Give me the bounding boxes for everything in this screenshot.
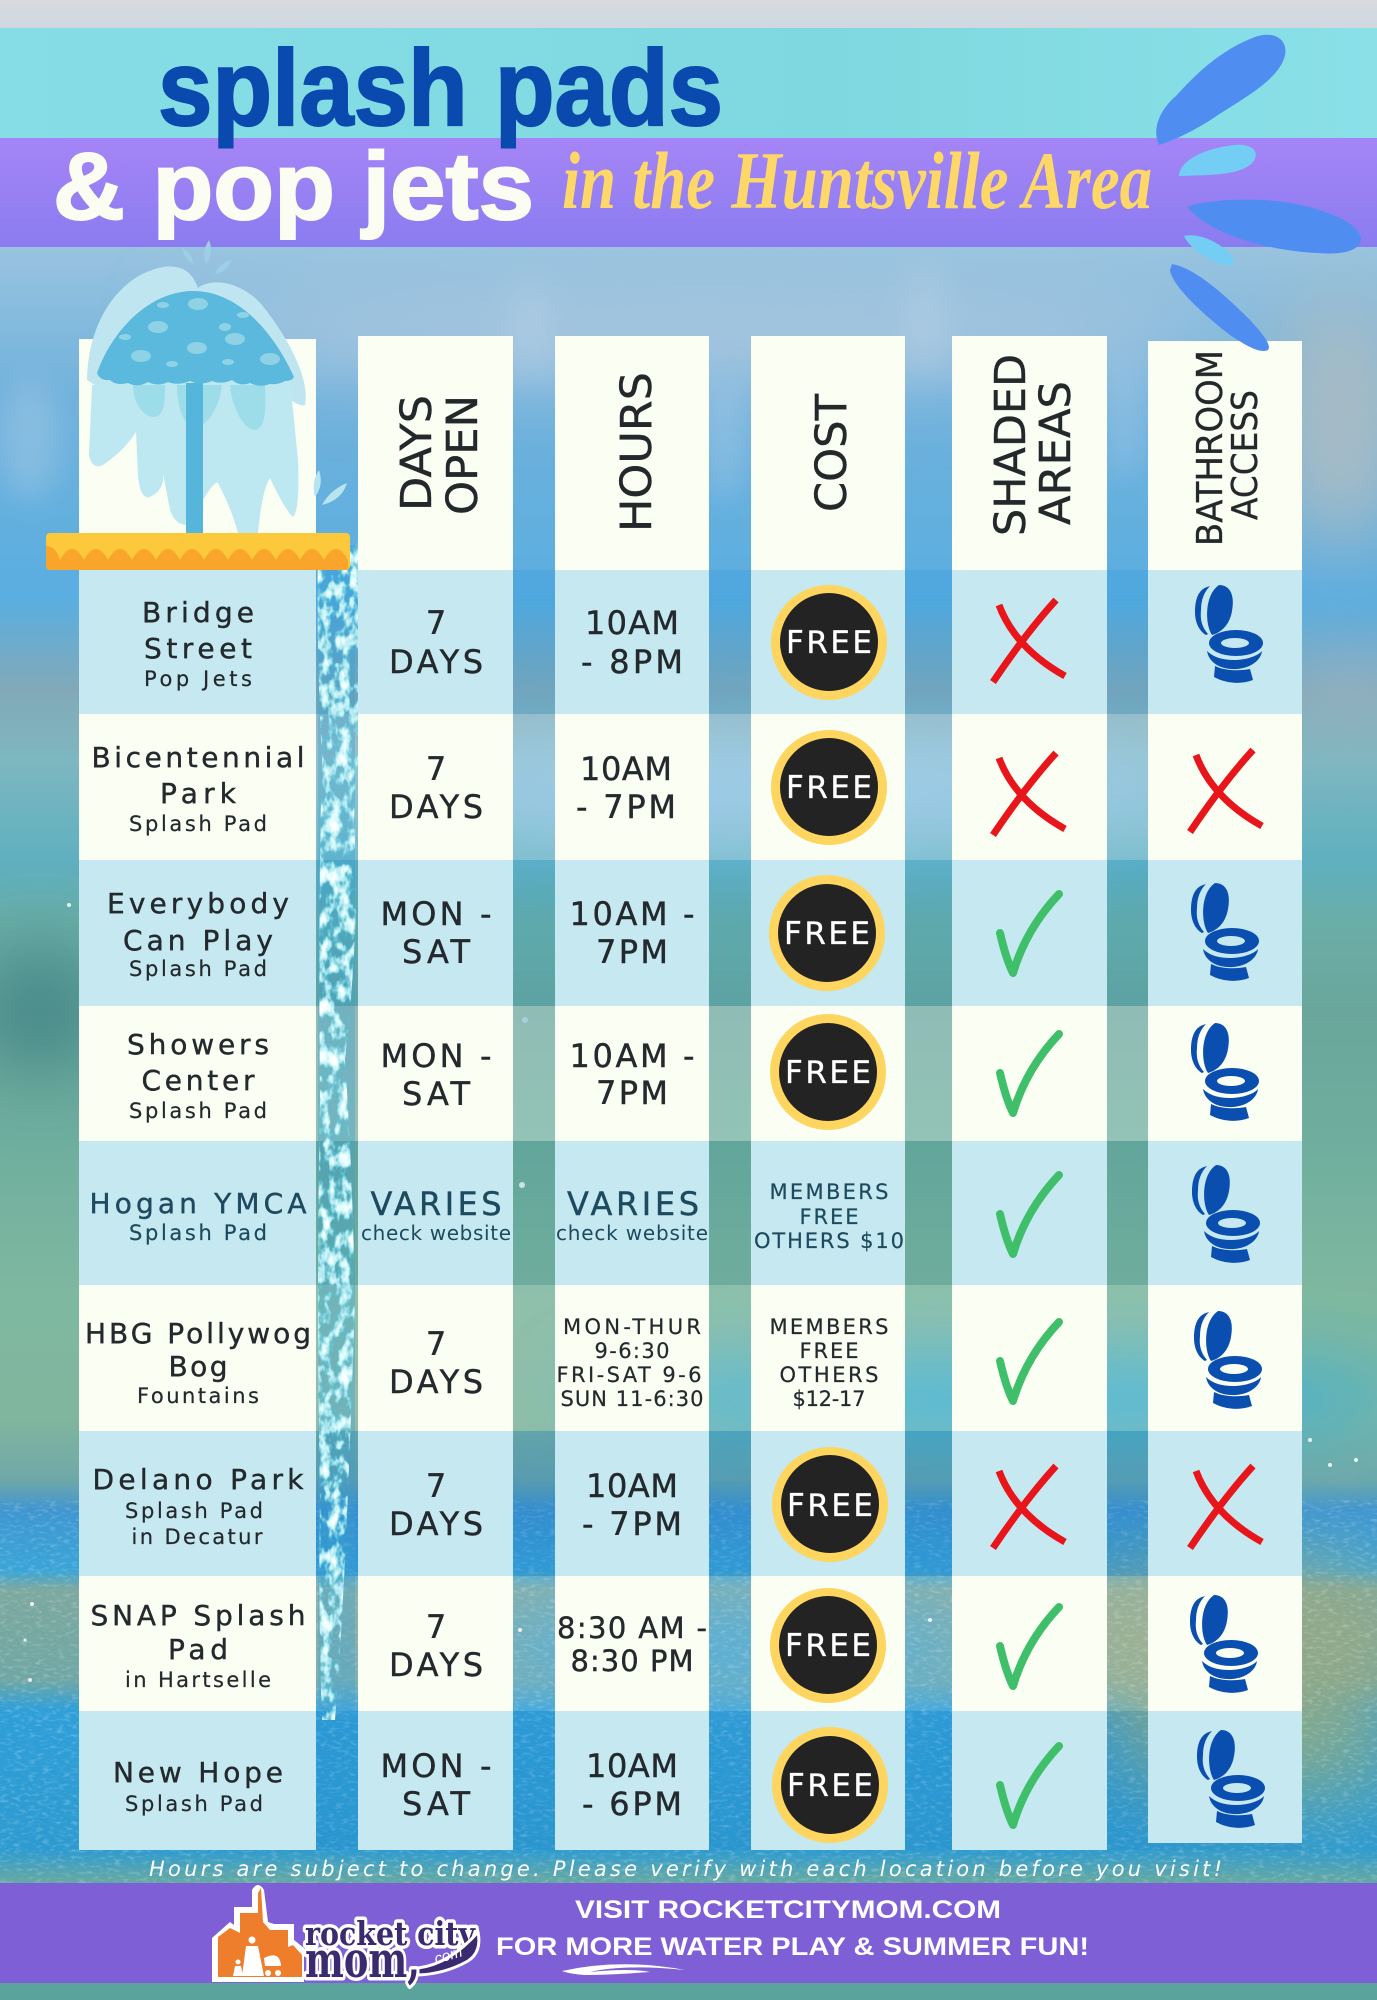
hours: - 7PM: [582, 1505, 682, 1543]
free badge: FREE: [785, 1628, 871, 1664]
cost: [770, 1315, 888, 1411]
column header: bathroom access: BATHROOM: [1190, 350, 1231, 546]
days: DAYS: [389, 643, 483, 681]
days: DAYS: [389, 1505, 483, 1543]
days: [380, 1037, 492, 1113]
hours: 8:30 PM: [570, 1644, 694, 1678]
header band: teal: [0, 28, 1377, 138]
hours: 9-6:30: [594, 1339, 670, 1363]
cost: OTHERS: [780, 1363, 878, 1387]
logo buildings: [218, 1888, 302, 1977]
days: MON -: [380, 895, 492, 933]
logo .com swoosh: .com: [428, 1944, 464, 1969]
column header: bathroom access: ACCESS: [1225, 390, 1266, 520]
hours: 10AM: [586, 1467, 678, 1505]
shade yes: [1000, 1034, 1059, 1113]
umbrella spots: [119, 298, 280, 367]
hours: [570, 1037, 694, 1112]
falling water: [89, 380, 298, 533]
back water dome: [87, 267, 306, 405]
column header: shaded areas: AREAS: [1031, 381, 1081, 525]
name: Delano Park: [92, 1463, 304, 1496]
name: [142, 596, 254, 691]
free badge: [769, 875, 885, 991]
row: New Hope: [79, 1711, 1302, 1850]
hours: - 6PM: [582, 1785, 682, 1823]
days: [380, 1747, 492, 1823]
hours: 10AM -: [570, 895, 694, 933]
water stream: [318, 540, 358, 1720]
row: Delano Park: [79, 1431, 1302, 1576]
name: Splash Pad: [129, 1221, 267, 1245]
hours: [570, 895, 694, 971]
days: 7: [426, 1467, 446, 1505]
name: [92, 741, 304, 836]
logo wordmark: mom: mom,: [305, 1930, 420, 1989]
name: Fountains: [137, 1384, 259, 1408]
bathroom icon: [1192, 1165, 1260, 1263]
column header: hours: [555, 336, 709, 570]
shade yes: [1000, 1322, 1059, 1401]
name: [107, 887, 289, 981]
free badge: [770, 1588, 886, 1703]
hours: 10AM -: [570, 1037, 694, 1075]
shade yes: [1000, 1746, 1059, 1825]
hours: FRI-SAT 9-6: [556, 1363, 702, 1387]
name: Splash Pad: [125, 1792, 263, 1816]
splash droplets: [1156, 35, 1361, 351]
name: Hogan YMCA: [90, 1187, 306, 1220]
column header: location (blank with fountain): [79, 339, 316, 570]
name: [90, 1599, 306, 1692]
column header: shaded areas: [952, 336, 1107, 570]
hours: MON-THUR: [563, 1315, 701, 1339]
name: in Decatur: [132, 1525, 263, 1549]
free badge: FREE: [786, 770, 872, 806]
no bathroom: [1190, 750, 1262, 832]
hours: 10AM: [585, 604, 679, 642]
logo wordmark: rocket city: rocket city: [305, 1914, 476, 1953]
shade yes: [1000, 1607, 1059, 1686]
free badge: [772, 1447, 888, 1562]
hours: 10AM: [580, 750, 672, 788]
hours: 8:30 AM -: [557, 1611, 707, 1645]
free badge: FREE: [787, 1488, 873, 1524]
hours: [557, 1611, 707, 1678]
hours: [576, 750, 676, 826]
row: Everybody Can Play: [79, 860, 1302, 1006]
name: [92, 1463, 304, 1549]
hours: 7PM: [596, 933, 668, 971]
name: Splash Pad: [129, 812, 267, 836]
brush swoosh: [562, 1964, 685, 1975]
name: Park: [160, 777, 237, 810]
days: 7: [426, 1608, 446, 1646]
disclaimer note: Hours are subject to change. Please verify with each location before you visit!: [149, 1857, 1222, 1881]
name: in Hartselle: [125, 1668, 271, 1692]
row: SNAP Splash Pad: [79, 1576, 1302, 1711]
hours: - 7PM: [576, 788, 676, 826]
no bathroom: [1190, 1466, 1262, 1548]
days: MON -: [380, 1747, 492, 1785]
days: [389, 750, 483, 826]
column header: days open: [358, 336, 513, 570]
days: MON -: [380, 1037, 492, 1075]
free badge: FREE: [785, 1055, 871, 1091]
row: Bicentennial Park: [79, 714, 1302, 860]
free badge: [771, 730, 887, 845]
name: [85, 1317, 311, 1408]
name: Splash Pad: [129, 957, 267, 981]
logo .com swoosh: [418, 1932, 479, 1975]
cost: [754, 1180, 904, 1253]
free badge: [770, 1014, 886, 1130]
free badge: FREE: [787, 1768, 873, 1804]
name: Pop Jets: [144, 667, 252, 691]
days: check website: [361, 1221, 511, 1245]
hours: [556, 1185, 708, 1245]
row: Hogan YMCA: [79, 1141, 1302, 1285]
name: Center: [142, 1064, 255, 1097]
column header: shaded areas: SHADED: [986, 354, 1036, 536]
days: [389, 1325, 483, 1401]
name: [113, 1756, 283, 1816]
column header: hours: HOURS: [612, 372, 662, 532]
header band: purple: [0, 138, 1377, 247]
footer call to action: VISIT ROCKETCITYMOM.COM: [575, 1896, 1001, 1924]
column header: cost: COST: [807, 393, 857, 512]
inner water drips: [133, 385, 265, 430]
days: SAT: [402, 1785, 470, 1823]
hours: SUN 11-6:30: [560, 1387, 704, 1411]
column header: cost: [751, 336, 905, 570]
name: Bog: [168, 1350, 228, 1383]
top water droplets: [182, 240, 232, 274]
days: [389, 1467, 483, 1543]
title: splash pads: splash pads: [158, 27, 723, 148]
no shade: [993, 600, 1065, 682]
days: DAYS: [389, 788, 483, 826]
name: Showers: [127, 1028, 269, 1061]
hours: 7PM: [596, 1074, 668, 1112]
name: New Hope: [113, 1756, 283, 1789]
name: Bicentennial: [92, 741, 304, 774]
bathroom icon: [1194, 1311, 1262, 1409]
fountain illustration: [46, 240, 350, 570]
name: Splash Pad: [125, 1499, 263, 1523]
row: Bridge Street: [79, 570, 1302, 714]
subtitle: in the Huntsville Area: in the Huntsville Area: [562, 135, 1152, 226]
days: 7: [426, 604, 446, 642]
no shade: [993, 753, 1065, 835]
days: DAYS: [389, 1363, 483, 1401]
footer call to action: FOR MORE WATER PLAY & SUMMER FUN!: [496, 1933, 1089, 1961]
name: [127, 1028, 269, 1123]
free badge: FREE: [786, 625, 872, 661]
name: Everybody: [107, 887, 289, 920]
days: VARIES: [370, 1185, 502, 1223]
days: 7: [426, 750, 446, 788]
hours: [556, 1315, 704, 1411]
cost: FREE: [800, 1339, 858, 1363]
row: Showers Center: [79, 1006, 1302, 1141]
bathroom icon: [1195, 585, 1263, 683]
free badge: FREE: [784, 916, 870, 952]
free badge: [772, 1727, 888, 1843]
row tint overlays: [79, 570, 1302, 1850]
umbrella top: [97, 291, 294, 386]
cost: OTHERS $10: [754, 1229, 904, 1253]
hours: - 8PM: [581, 643, 683, 681]
name: Bridge: [142, 596, 254, 629]
days: [389, 604, 483, 681]
cost: FREE: [800, 1205, 858, 1229]
days: DAYS: [389, 1646, 483, 1684]
footer call to action: [496, 1896, 1089, 1961]
cost: $12-17: [792, 1387, 866, 1411]
logo family silhouettes: [233, 1936, 281, 1976]
logo white outline: [212, 1885, 304, 1982]
name: Pad: [168, 1633, 228, 1666]
side droplets: [314, 470, 347, 505]
shade yes: [1000, 894, 1059, 973]
logo: rocket city mom: [212, 1885, 479, 1989]
bathroom icon: [1191, 883, 1259, 981]
hours: 10AM: [586, 1747, 678, 1785]
column header: bathroom access: [1148, 341, 1302, 570]
days: SAT: [402, 1075, 470, 1113]
days: [380, 895, 492, 971]
free badge: [771, 585, 887, 700]
column header: days open: OPEN: [438, 395, 488, 515]
bathroom icon: [1190, 1595, 1258, 1693]
bathroom icon: [1197, 1730, 1265, 1828]
row: HBG Pollywog Bog: [79, 1285, 1302, 1431]
footer band: [0, 1883, 1377, 1983]
column header: days open: DAYS: [392, 395, 442, 511]
name: HBG Pollywog: [85, 1317, 311, 1350]
orange base: [46, 533, 350, 570]
hours: [581, 604, 683, 681]
cost: MEMBERS: [770, 1315, 888, 1339]
hours: check website: [556, 1221, 708, 1245]
title: & pop jets: & pop jets: [53, 133, 534, 240]
days: [389, 1608, 483, 1684]
days: [361, 1185, 511, 1245]
hours: [582, 1467, 682, 1543]
stem: [186, 383, 203, 533]
cost: MEMBERS: [770, 1180, 888, 1204]
bathroom icon: [1191, 1023, 1259, 1121]
hours: [582, 1747, 682, 1823]
name: Splash Pad: [129, 1099, 267, 1123]
no shade: [993, 1466, 1065, 1548]
days: 7: [426, 1325, 446, 1363]
days: SAT: [402, 933, 470, 971]
name: Can Play: [123, 924, 273, 957]
name: SNAP Splash: [90, 1599, 306, 1632]
name: [90, 1187, 306, 1245]
name: Street: [144, 632, 252, 665]
hours: VARIES: [567, 1185, 699, 1223]
shade yes: [1000, 1175, 1059, 1254]
